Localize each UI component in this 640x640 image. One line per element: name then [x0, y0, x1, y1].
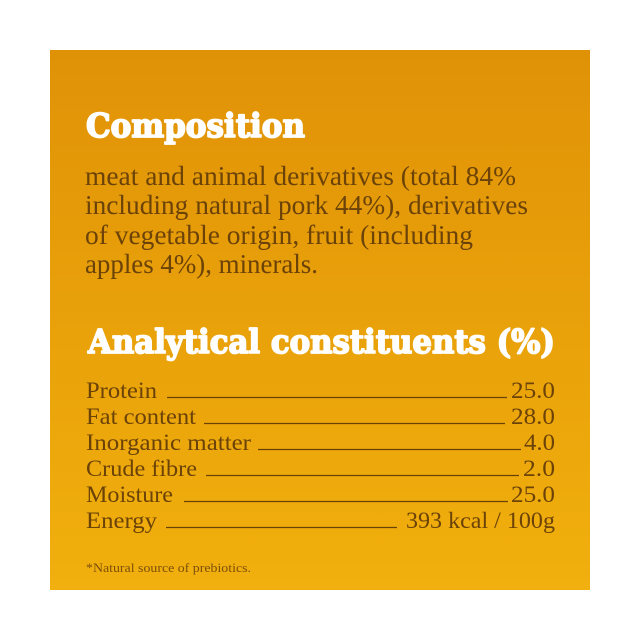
row: protein	[86, 378, 555, 403]
text block: composition ingredients: including natural pork 44%), derivatives	[85, 190, 528, 220]
row: crude fibre	[86, 456, 555, 481]
row: energy	[86, 508, 556, 533]
text block: composition ingredients: of vegetable origin, fruit (including	[85, 220, 473, 250]
row: protein: 25.0	[511, 378, 555, 403]
text block: composition ingredients	[85, 161, 528, 279]
heading: Composition: Composition	[86, 106, 305, 145]
table: analytical constituents	[86, 378, 556, 533]
row: inorganic matter: 4.0	[524, 430, 555, 455]
row: moisture: Moisture	[86, 482, 173, 507]
row: inorganic matter: Inorganic matter	[86, 430, 251, 455]
heading: Analytical constituents: Analytical constituents (%)	[87, 322, 555, 361]
row: crude fibre: 2.0	[523, 456, 555, 481]
row: inorganic matter	[86, 430, 555, 455]
row: fat content	[86, 404, 555, 429]
panel: orange background	[50, 50, 590, 590]
row: moisture: 25.0	[511, 482, 555, 507]
row: moisture	[86, 482, 555, 507]
row: fat content: 28.0	[511, 404, 555, 429]
row: energy: 393 kcal / 100g	[406, 508, 556, 533]
row: crude fibre: Crude fibre	[86, 456, 197, 481]
footnote: *Natural source of prebiotics.	[86, 560, 251, 575]
text block: composition ingredients: apples 4%), minerals.	[85, 249, 318, 279]
text block: composition ingredients: meat and animal derivatives (total 84%	[85, 161, 516, 191]
row: energy: Energy	[86, 508, 158, 533]
row: protein: Protein	[86, 378, 158, 403]
row: fat content: Fat content	[86, 404, 197, 429]
